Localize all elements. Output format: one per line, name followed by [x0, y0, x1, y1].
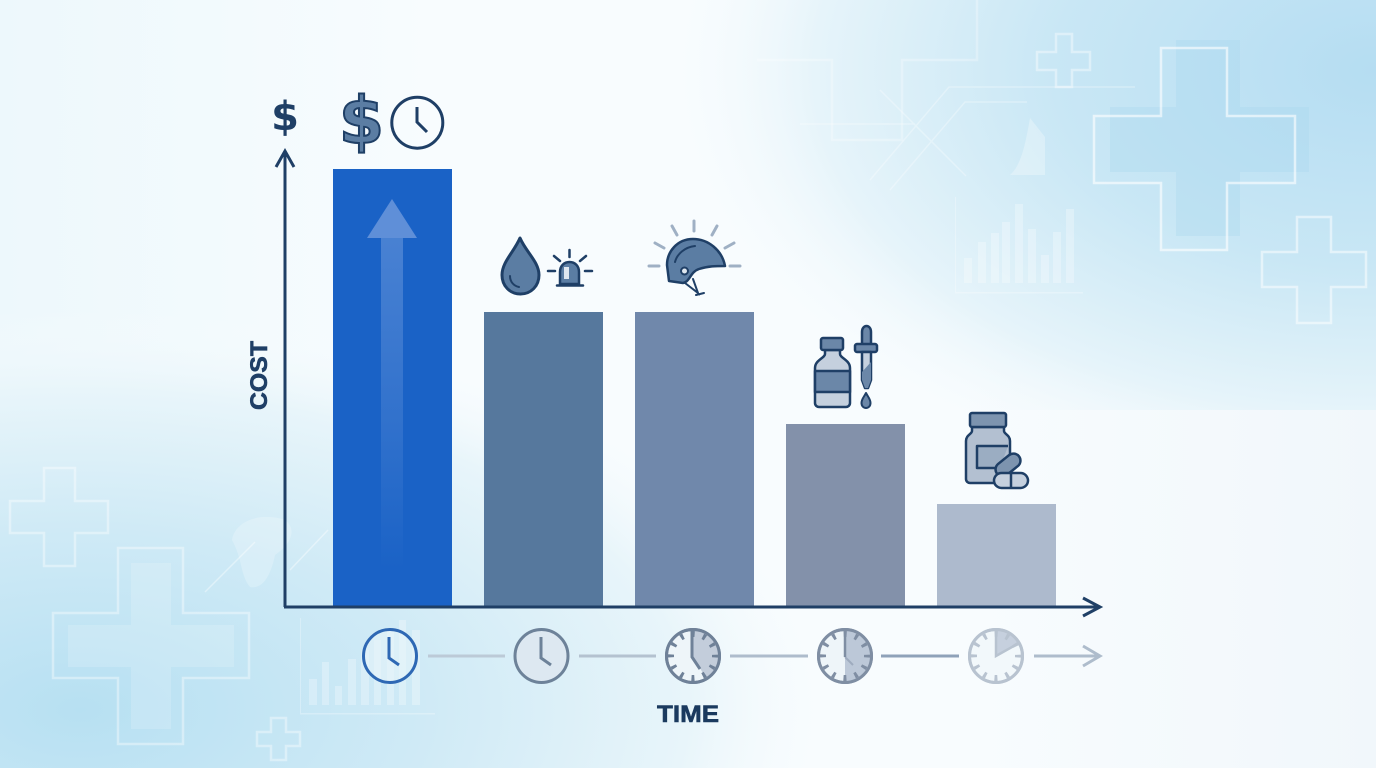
y axis label: cost: COST [246, 341, 273, 410]
background: top-right medical crosses [757, 0, 1366, 323]
clock 2 [515, 630, 568, 682]
x axis arrow [284, 598, 1100, 616]
bar 5 [937, 504, 1056, 606]
clock 3 [666, 630, 720, 682]
icon: alarm siren [548, 250, 592, 286]
time progression timeline [364, 630, 1100, 682]
bar chart [333, 169, 1056, 606]
clock 1 [364, 630, 416, 682]
icon: helmet [649, 221, 740, 295]
background: bottom-left leaf and lines [205, 517, 328, 592]
icon: clock above bar 1 [392, 97, 443, 148]
icon: large dollar sign: $ [339, 84, 384, 159]
connector lines [428, 646, 1100, 666]
icon: dropper [855, 326, 877, 408]
background: bottom-left medical crosses [10, 468, 300, 760]
background: network lines and document [800, 87, 1135, 190]
icon: capsules [993, 451, 1028, 488]
y axis arrow [276, 151, 294, 607]
y axis dollar sign: $ [271, 94, 299, 140]
icon: upward arrow in bar [367, 199, 417, 570]
icon: water drop [502, 238, 539, 294]
background: top-right mini bar chart [955, 197, 1083, 294]
bar 1: highest cost [333, 169, 452, 606]
icon: pill jar [966, 413, 1028, 488]
x axis label: time: TIME [657, 701, 719, 728]
bar 2 [484, 312, 603, 606]
clock 5 [970, 630, 1022, 682]
bar 3 [635, 312, 754, 606]
background: bottom-left mini bar chart [300, 618, 435, 714]
bar 4 [786, 424, 905, 606]
icon: vial [815, 338, 850, 407]
clock 4 [818, 630, 872, 682]
